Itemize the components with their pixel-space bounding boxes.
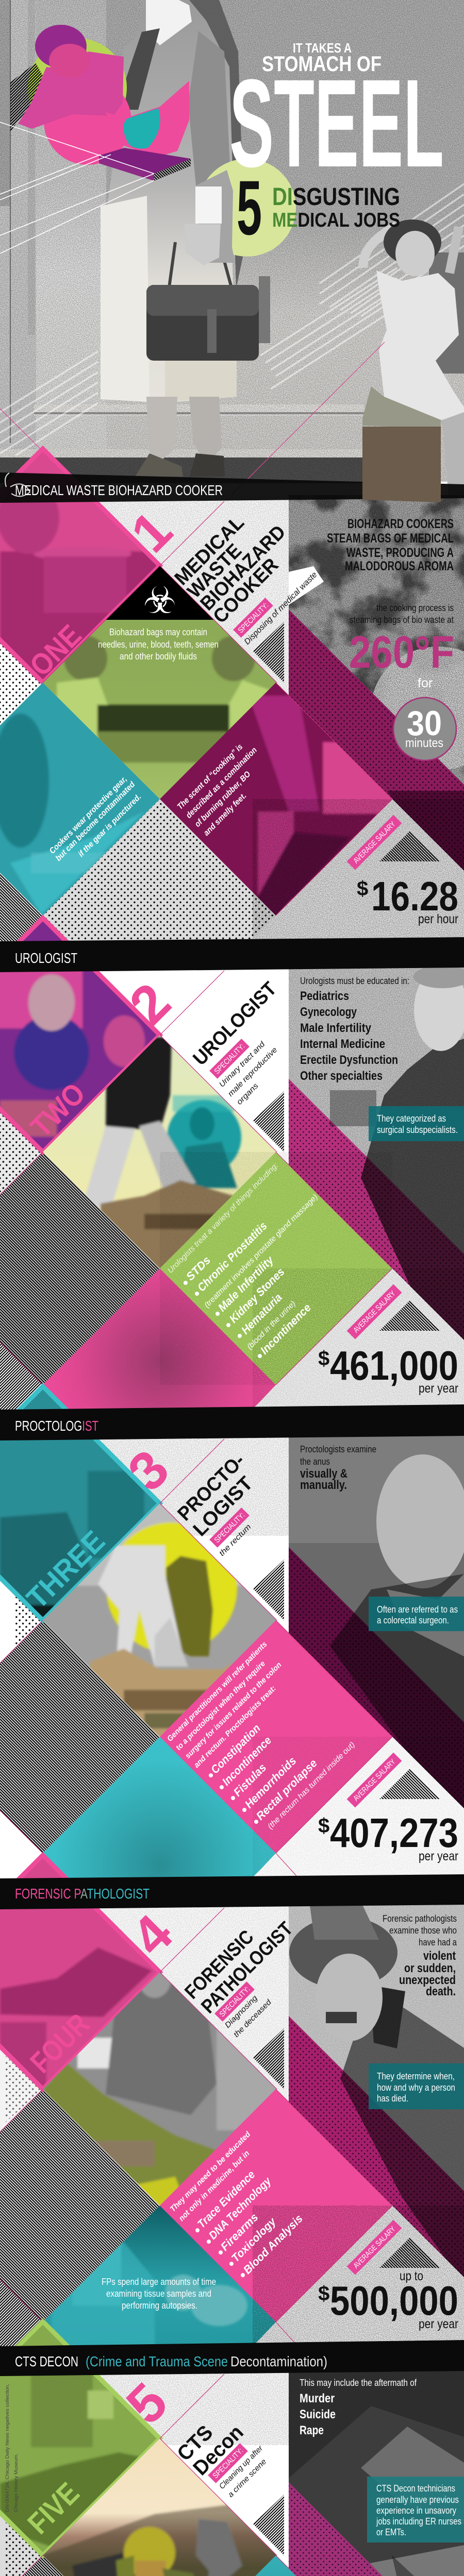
for label: for [418, 676, 433, 690]
banner: forensic pathologist [0, 1874, 464, 1909]
teal panel text: but can become contaminated [54, 780, 137, 863]
right column specialties list: Erectile Dysfunction [300, 1053, 398, 1067]
photo credit [5, 2384, 19, 2512]
right column text [383, 1913, 457, 1998]
section 2: urologist [0, 915, 464, 1410]
pink panel text and list: (the rectum has turned inside out) [266, 1740, 357, 1831]
teal note text: They categorized as [377, 1113, 446, 1124]
banner: proctologist: PROCTOLOGIST [15, 1418, 98, 1434]
subtitle: disgusting: DISGUSTING [272, 183, 400, 211]
number 1: 1 [120, 500, 184, 564]
speciality tag: SPECIALITY: [211, 2446, 245, 2480]
green panel condition list: Male Infertility [216, 1253, 276, 1314]
pink panel text and list: Constipation [208, 1721, 263, 1776]
pink panel text and list: Hemorrhoids [242, 1754, 299, 1811]
right column text [300, 1444, 376, 1492]
green panel text: Biohazard bags may contain [109, 627, 207, 637]
green panel condition list: Incontinence [258, 1301, 313, 1357]
green panel condition list: Hematuria [239, 1291, 285, 1337]
teal panel text: performing autopsies. [122, 2300, 197, 2311]
green panel condition list: (treatment involves prostate gland massage) [203, 1193, 320, 1310]
right column text [300, 2378, 417, 2437]
right column specialties list: Urologists must be educated in: [300, 976, 409, 986]
green panel condition list: (blood in the urine) [245, 1299, 297, 1351]
speciality tag: SPECIALITY: [218, 1985, 252, 2019]
banner: urologist [0, 937, 464, 972]
right column text: death. [426, 1985, 456, 1998]
speciality tag: SPECIALITY: [212, 1511, 246, 1545]
right column text: Proctologists examine [300, 1444, 376, 1454]
section 4 shapes [0, 1852, 464, 2346]
right column text: Rape [300, 2424, 324, 2437]
pink panel text and list: to a proctologist when they require [174, 1659, 267, 1752]
salary label: AVERAGE SALARY [352, 1757, 397, 1803]
right column headline [327, 517, 454, 573]
thirty minutes circle [393, 698, 456, 760]
thirty minutes circle: 30 [407, 704, 442, 743]
purple panel text: described as a combination [185, 745, 259, 820]
up to: up to [400, 2269, 423, 2283]
photo credit: Chicago History Museum. [13, 2453, 19, 2512]
salary figure: $ [357, 877, 368, 900]
cooking process text [350, 603, 454, 625]
pink panel text and list: not only in medicine, but in [177, 2149, 251, 2223]
section 3 shapes [0, 1383, 464, 1878]
section 5 shapes [0, 2321, 464, 2576]
pink panel text and list: Toxicology [229, 2214, 279, 2265]
pink panel text and list: surgery for issues related to the colon [184, 1660, 284, 1760]
section 4: forensic pathologist [0, 1852, 464, 2346]
teal note text: a colorectal surgeon. [377, 1615, 449, 1625]
green panel text: and other bodily fluids [120, 651, 197, 662]
section 3: proctologist [0, 1383, 464, 1878]
right column text: violent [423, 1949, 456, 1963]
teal note text: or EMTs. [376, 2527, 406, 2537]
large green circle behind number five [198, 159, 296, 257]
right column text: Murder [300, 2392, 335, 2405]
speciality text: Urinary tract and [218, 1040, 267, 1089]
pink panel text and list: DNA Technology [206, 2174, 274, 2242]
label: one: ONE [23, 618, 88, 683]
salary figure: $ [318, 2282, 329, 2305]
pink panel text and list: Firearms [218, 2211, 261, 2253]
pink panel text and list: Blood Analysis [241, 2212, 305, 2277]
banner: cts decon: CTS DECON [15, 2353, 78, 2369]
banner: urologist: UROLOGIST [15, 950, 77, 966]
banner: proctologist [0, 1404, 464, 1440]
purple panel text: The scent of “cooking” is [176, 742, 245, 811]
green panel condition list: Kidney Stones [227, 1265, 287, 1326]
teal panel text: Cookers wear protective gear, [48, 775, 129, 856]
subtitle: medical jobs: MEDICAL JOBS [272, 209, 400, 231]
pink panel text and list [165, 1640, 357, 1831]
right column specialties list: Pediatrics [300, 989, 349, 1003]
card title [171, 512, 290, 628]
green panel condition list: STDs [184, 1253, 213, 1283]
label: three: THREE [20, 1524, 111, 1615]
speciality text: Diagnosing [223, 1993, 259, 2030]
hero photo background [0, 0, 464, 483]
title: it takes a: IT TAKES A [293, 40, 352, 56]
right column specialties list: Internal Medicine [300, 1037, 385, 1051]
speciality text: Disposing of medical waste [243, 570, 319, 647]
doctor bag [146, 242, 270, 361]
speciality text: Cleaning up after [218, 2444, 265, 2491]
speciality tag: SPECIALITY: [212, 1042, 246, 1076]
card title [181, 1918, 297, 2018]
card title: CTS [173, 2421, 218, 2465]
card title: Decon [189, 2421, 248, 2480]
salary label: AVERAGE SALARY [352, 2225, 397, 2270]
right column specialties list [300, 976, 409, 1083]
green panel condition list: Urologists treat a variety of things including: [166, 1161, 280, 1275]
teal note text [377, 1113, 458, 1135]
purple panel text: and smelly feet. [202, 791, 248, 838]
biohazard icon: ☣ [143, 579, 176, 622]
purple panel text: of burning rubber, BO [193, 770, 253, 829]
section 5: cts decon [0, 2321, 464, 2576]
diagonal white wall stripes [0, 184, 464, 455]
pink panel text and list: Trace Evidence [195, 2168, 257, 2231]
card title: COOKER [209, 554, 283, 628]
banner: forensic pathologist: FORENSIC PATHOLOGIST [15, 1886, 150, 1902]
right column text: the anus [300, 1456, 330, 1467]
pink panel text and list: and rectum. Proctologists treat: [192, 1684, 278, 1770]
right column text: visually & [300, 1467, 347, 1481]
purple panel text [176, 742, 259, 838]
number 2: 2 [118, 972, 182, 1036]
banner: cts decon: Decontamination) [230, 2353, 327, 2369]
green panel condition list [166, 1161, 320, 1358]
photo credit: DN-0064734, Chicago Daily News negatives collection, [5, 2384, 10, 2512]
right column text: This may include the aftermath of [300, 2378, 417, 2388]
pink panel text and list: Fistulas [231, 1761, 269, 1799]
right column text: have had a [419, 1937, 457, 1947]
card title: WASTE [184, 540, 246, 602]
nurse figure [101, 0, 237, 477]
banner: cts decon [0, 2340, 464, 2376]
teal panel text: FPs spend large amounts of time [102, 2277, 216, 2287]
right column specialties list: Male Infertility [300, 1021, 372, 1035]
title: stomach of: STOMACH OF [262, 52, 382, 76]
speciality text [223, 1993, 273, 2039]
speciality tag: SPECIALITY: [236, 601, 270, 635]
salary figure: $ [318, 1347, 329, 1370]
teal note text: has died. [377, 2093, 408, 2104]
thirty minutes circle: minutes [405, 736, 443, 750]
salary figure: $ [318, 1815, 329, 1837]
card title: PATHOLOGIST [197, 1918, 297, 2018]
banner: medical waste biohazard cooker [0, 472, 464, 503]
right column text: manually. [300, 1478, 347, 1492]
teal panel text: if the gear is punctured. [77, 792, 143, 859]
number 3: 3 [117, 1438, 180, 1502]
pink panel text and list: General practitioners will refer patients [165, 1640, 269, 1743]
label: five: FIVE [21, 2476, 86, 2540]
pink panel text and list: They may need to be educated [169, 2130, 253, 2214]
number 5: 5 [115, 2371, 179, 2435]
section 2 shapes [0, 915, 464, 1410]
seated nurse with raised arms [362, 219, 464, 497]
section 1: medical waste biohazard cooker [0, 445, 464, 941]
speciality text: the deceased [232, 1997, 273, 2039]
speciality text: the rectum [218, 1522, 253, 1558]
green panel text: needles, urine, blood, teeth, semen [98, 639, 219, 650]
pink collage man with microscope and bird [0, 25, 191, 253]
card title: LOGIST [189, 1472, 257, 1540]
salary label: AVERAGE SALARY [352, 820, 397, 866]
pink panel text and list [169, 2130, 305, 2277]
speciality text: a crime scene [226, 2458, 268, 2499]
big number five: 5 [237, 164, 262, 251]
salary label: AVERAGE SALARY [352, 1289, 397, 1335]
card title: BIOHAZARD [196, 521, 290, 615]
teal panel text: examining tissue samples and [106, 2289, 211, 2299]
pink panel text and list: Rectal prolapse [254, 1757, 320, 1823]
teal panel text [102, 2277, 216, 2311]
speciality text: male reproductive [226, 1045, 279, 1098]
teal note text [376, 2483, 461, 2537]
number 4: 4 [120, 1903, 184, 1967]
card title: MEDICAL [171, 512, 248, 589]
right column specialties list: Gynecology [300, 1005, 357, 1019]
thin pink hero lines [0, 342, 385, 565]
card title: PROCTO- [174, 1450, 249, 1525]
right column text: Suicide [300, 2408, 336, 2421]
pink panel text and list: Incontinence [220, 1734, 274, 1788]
section 1 shapes [0, 445, 464, 941]
green panel text [98, 627, 219, 662]
card title: FORENSIC [181, 1926, 258, 2003]
label: four: FOUR [24, 2007, 96, 2079]
speciality text [218, 1040, 279, 1107]
label: two: TWO [24, 1076, 92, 1144]
card title: UROLOGIST [189, 978, 281, 1070]
teal note text [377, 1604, 458, 1625]
teal note text [377, 2071, 455, 2104]
green panel condition list: Chronic Prostatitis [195, 1219, 270, 1294]
wall shadow behind nurse [189, 0, 245, 289]
speciality text: organs [235, 1081, 260, 1107]
banner: medical waste biohazard cooker: MEDICAL WASTE BIOHAZARD COOKER [15, 482, 223, 498]
banner: cts decon: (Crime and Trauma Scene [86, 2353, 228, 2369]
right column specialties list: Other specialties [300, 1069, 383, 1083]
